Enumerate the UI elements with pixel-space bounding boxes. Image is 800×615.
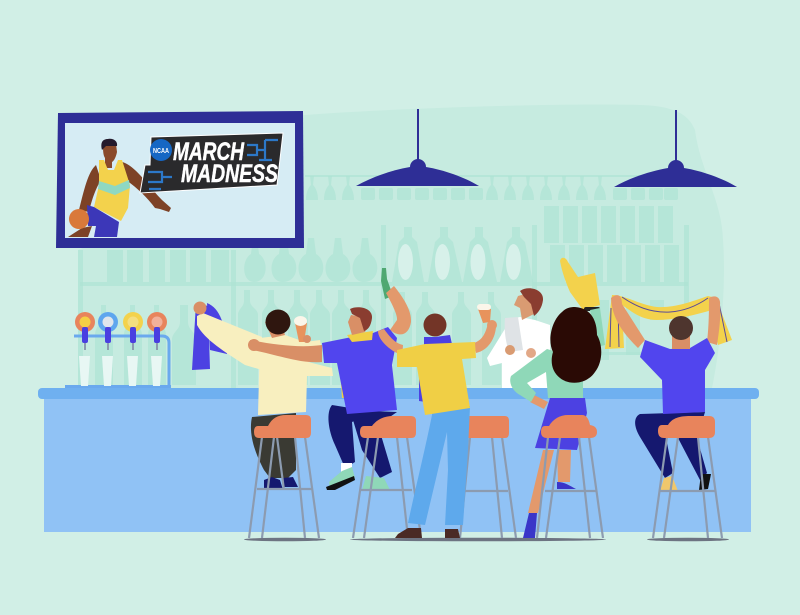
arms <box>611 295 645 348</box>
head <box>672 335 690 349</box>
basketball player <box>68 139 171 237</box>
shoes <box>264 477 298 490</box>
tap handles <box>75 312 167 350</box>
pendant lamp left <box>356 109 479 186</box>
shoes <box>523 482 576 538</box>
front shoe <box>329 467 355 490</box>
TV frame <box>56 111 304 248</box>
hanging scarf <box>340 368 352 398</box>
head <box>424 314 446 336</box>
stacked boxes <box>544 206 679 282</box>
pendant lamp right <box>614 110 737 187</box>
shoes <box>395 528 460 538</box>
skirt <box>535 398 587 450</box>
shoes <box>660 476 678 491</box>
March Madness logo <box>140 133 283 193</box>
torso <box>640 338 715 414</box>
head <box>348 315 370 335</box>
hair <box>550 307 601 383</box>
pants <box>251 413 296 478</box>
fan 2: purple shirt with beer bottle <box>248 268 411 490</box>
towel <box>207 303 227 354</box>
torso and right arm <box>258 335 333 415</box>
March Madness logo: MADNESS <box>181 160 278 188</box>
stool 1 <box>249 415 319 538</box>
fan 4: woman with foam finger <box>510 258 605 538</box>
stool 4 <box>537 415 603 538</box>
right arm with hand <box>474 322 496 353</box>
round flasks <box>244 238 377 282</box>
stool 2 <box>353 416 420 538</box>
head <box>265 320 285 338</box>
back leg <box>350 410 397 478</box>
beer glass <box>478 309 491 323</box>
beer taps <box>65 312 171 388</box>
torso <box>322 327 397 414</box>
lower shelf bottles <box>95 290 688 385</box>
fan 3: yellow shirt standing <box>378 304 497 538</box>
beer bottle <box>381 268 393 299</box>
raised arm <box>590 308 605 347</box>
bracket lines <box>247 140 278 160</box>
glass rack <box>305 175 679 200</box>
jeans <box>408 406 470 525</box>
legs <box>528 450 571 513</box>
hand <box>248 339 260 351</box>
torso <box>397 342 476 415</box>
raised arm <box>386 286 411 334</box>
arm raised <box>197 313 262 370</box>
logo wordmark: MARCH <box>173 138 245 166</box>
arm across <box>250 340 322 362</box>
stool 5 <box>653 416 722 538</box>
March Madness logo: NCAA <box>153 148 169 155</box>
foam finger <box>560 258 600 310</box>
beer glasses <box>79 356 162 386</box>
shelf posts and boards <box>78 225 689 388</box>
stool 3 <box>460 416 516 538</box>
beer glass <box>295 323 307 342</box>
mint top with arm <box>510 349 583 402</box>
floor shadows <box>244 538 729 541</box>
TV screen <box>65 123 295 238</box>
top shelf boxes <box>107 250 229 282</box>
left arm <box>378 329 403 361</box>
scarf <box>605 295 732 349</box>
front leg <box>328 405 375 468</box>
oval label bottles <box>392 227 533 282</box>
back wall shape <box>78 105 724 388</box>
bar counter <box>38 388 759 532</box>
NCAA badge <box>150 139 172 161</box>
back bar shelves <box>78 175 689 388</box>
tap pipe <box>74 336 169 386</box>
pants <box>635 412 707 480</box>
purple scarf <box>419 335 452 402</box>
hand on waist <box>530 394 548 409</box>
wall TV <box>56 111 304 248</box>
hand <box>194 302 206 314</box>
basketball <box>69 209 89 229</box>
fan 5: purple shirt with yellow scarf <box>605 295 732 491</box>
fan 1: cream shirt with towel <box>192 302 333 490</box>
bartender <box>487 288 550 388</box>
scarf <box>347 331 373 342</box>
